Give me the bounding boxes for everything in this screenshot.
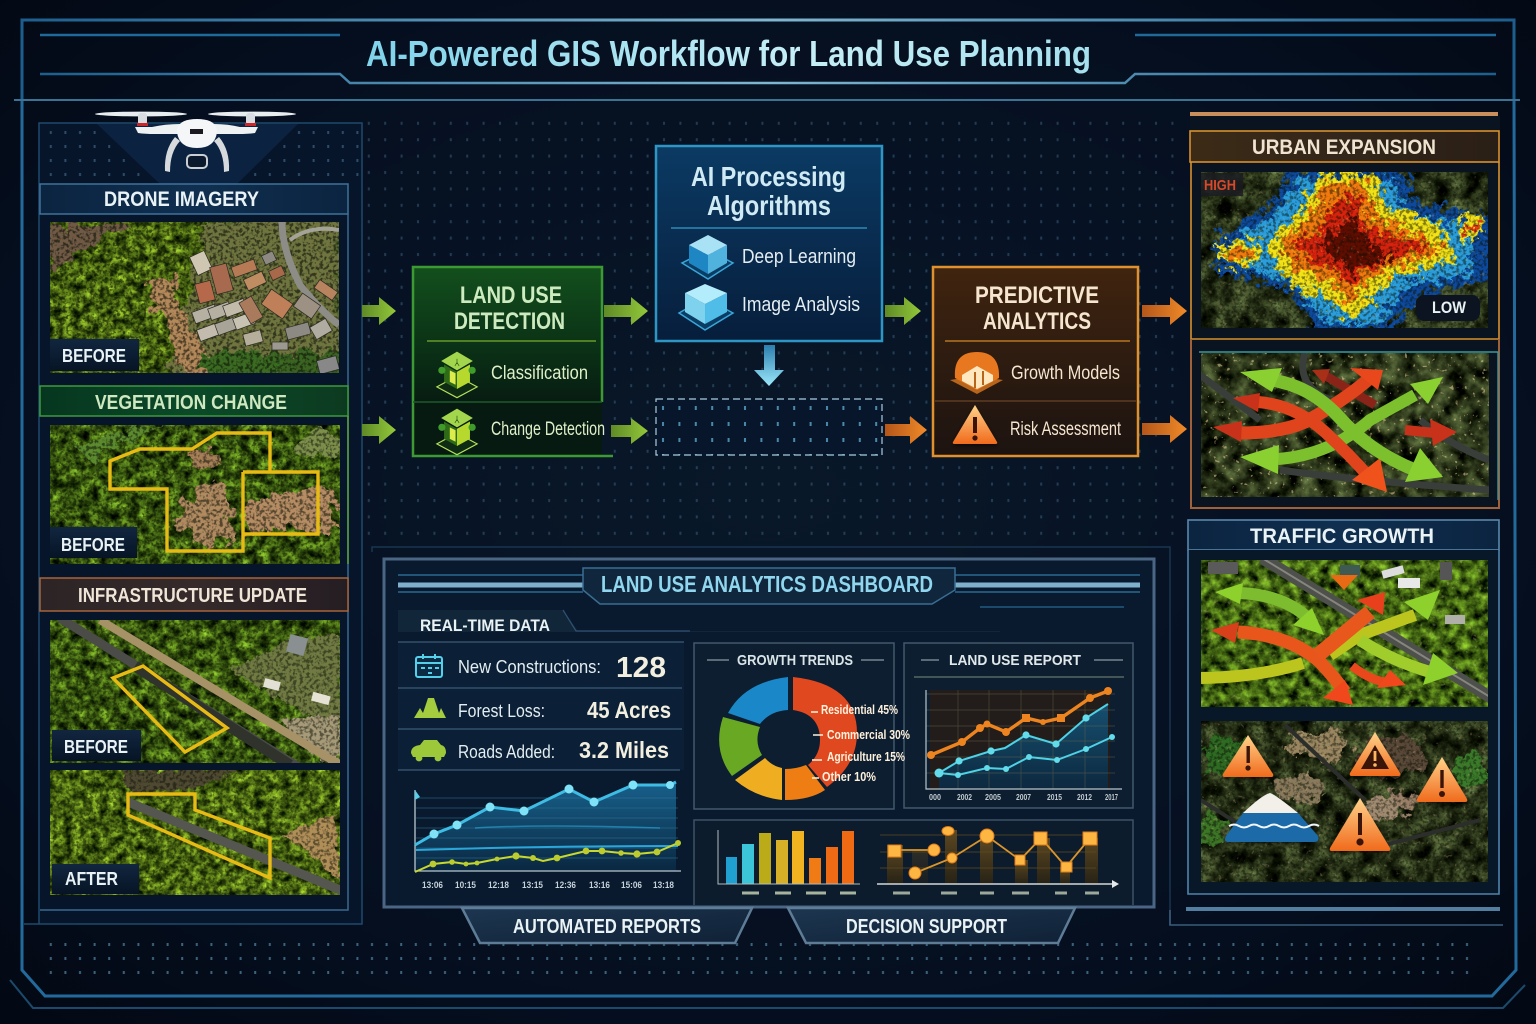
stat: forest loss: Forest Loss: — [458, 701, 545, 721]
line chart: real-time trend: 12:18 — [488, 880, 509, 891]
line chart: real-time trend: 13:18 — [653, 880, 674, 891]
heading: predictive analytics — [975, 282, 1099, 335]
arrow: red small top — [1312, 369, 1375, 405]
panel: real-time stats — [398, 642, 684, 770]
panel: growth trends donut: Agriculture 15% — [827, 750, 905, 764]
icon: image analysis cube — [679, 284, 733, 330]
icon: change detection — [437, 409, 477, 455]
heading: vegetation change: VEGETATION CHANGE — [95, 392, 287, 414]
image: highway after — [50, 770, 345, 895]
icon: classification — [437, 352, 477, 398]
text: image analysis: Image Analysis — [742, 294, 860, 316]
heat map: urban expansion — [1201, 172, 1488, 328]
line chart: real-time trend — [415, 780, 681, 891]
map: traffic flow arrows — [1200, 353, 1489, 497]
image: vegetation change with yellow outline — [50, 425, 342, 564]
map: risk warnings — [1196, 721, 1488, 882]
dashed placeholder box — [656, 399, 882, 455]
arrows: analytics into outputs — [1142, 297, 1187, 443]
icon: flood mountain — [1225, 793, 1319, 842]
tab: real-time data: REAL-TIME DATA — [420, 616, 550, 635]
line chart: real-time trend: 13:16 — [589, 880, 610, 891]
text: change detection: Change Detection — [491, 419, 605, 440]
panel: growth trends donut: Commercial 30% — [827, 728, 910, 742]
heading: infrastructure update: INFRASTRUCTURE UPDATE — [78, 585, 307, 607]
icon: warning triangle 2 — [1350, 732, 1400, 776]
stat: new constructions: 128 — [616, 652, 666, 684]
panel: land use detection — [413, 267, 613, 456]
stat: roads added: 3.2 Miles — [579, 737, 669, 763]
line chart: real-time trend: 12:36 — [555, 880, 576, 891]
arrow: red rising — [1213, 368, 1383, 442]
stat: forest loss: 45 Acres — [587, 697, 671, 723]
line chart: real-time trend: 10:15 — [455, 880, 477, 891]
panel: land use report chart: 2015 — [1047, 793, 1062, 802]
icon: drone — [95, 112, 296, 172]
panel: drone imagery and before/after sources — [24, 112, 362, 924]
label: high — [1201, 173, 1243, 196]
stat: forest loss — [414, 697, 671, 723]
map: traffic growth arrows — [1201, 558, 1495, 707]
icon: warning triangle 1 — [1223, 735, 1273, 777]
icon: growth models — [950, 352, 1003, 394]
icon: deep learning cube — [682, 235, 733, 279]
arrows: processing into analytics — [885, 297, 927, 444]
arrows: detection into processing — [604, 297, 648, 444]
heading: drone imagery — [40, 184, 348, 214]
tab: automated reports — [462, 908, 752, 943]
tab: automated reports: AUTOMATED REPORTS — [513, 916, 701, 938]
bar chart — [718, 830, 860, 893]
panel: predictive analytics — [933, 267, 1138, 456]
heading: land use detection: DETECTION — [454, 308, 565, 335]
text: risk assessment: Risk Assessment — [1010, 419, 1122, 440]
label: before — [50, 527, 137, 558]
panel: land use report chart — [904, 643, 1133, 808]
panel: land use report chart: 2012 — [1077, 793, 1092, 802]
label: before — [52, 730, 141, 761]
arrow: green top — [1215, 583, 1324, 635]
heading: land use detection — [454, 282, 565, 335]
icon: risk assessment warning — [953, 405, 997, 444]
tab: decision support: DECISION SUPPORT — [846, 916, 1007, 938]
heading: ai processing algorithms: AI Processing — [691, 161, 846, 192]
panel: land use report chart: 000 — [929, 793, 941, 802]
panel: land use report chart: 2005 — [985, 793, 1001, 802]
label: before — [50, 339, 139, 371]
panel: growth trends donut: GROWTH TRENDS — [737, 652, 853, 669]
stat: roads added: Roads Added: — [458, 742, 555, 762]
text: deep learning: Deep Learning — [742, 246, 856, 268]
arrow: red falling — [1211, 622, 1353, 705]
heading: land use analytics dashboard — [583, 568, 955, 604]
line chart: real-time trend: 13:06 — [422, 880, 443, 891]
panel: growth trends donut — [694, 643, 910, 809]
label: before: BEFORE — [61, 535, 125, 555]
panel: land use report chart: 2017 — [1105, 793, 1118, 802]
label: after: AFTER — [65, 869, 118, 889]
label: low: LOW — [1432, 298, 1467, 317]
text: classification: Classification — [491, 363, 588, 384]
panel: outputs column — [1170, 112, 1503, 925]
heading: urban expansion — [1190, 131, 1499, 162]
panel: dashboard — [372, 547, 1170, 925]
label: before: BEFORE — [64, 737, 128, 757]
icon: warning triangle 3 — [1417, 757, 1467, 802]
panel: land use report chart: LAND USE REPORT — [949, 652, 1081, 669]
arrow: green rising — [1240, 377, 1443, 474]
tab: decision support — [788, 908, 1075, 943]
arrow: red falling — [1233, 393, 1387, 492]
arrow: red short — [1405, 419, 1457, 446]
text: growth models: Growth Models — [1011, 363, 1120, 384]
heading: predictive analytics: ANALYTICS — [983, 308, 1091, 335]
arrows: sources into detection — [362, 297, 396, 444]
heading: vegetation change — [40, 386, 348, 416]
label: before: BEFORE — [62, 346, 126, 366]
heading: urban expansion: URBAN EXPANSION — [1252, 136, 1436, 159]
heading: traffic growth — [1188, 520, 1499, 550]
tab: real-time data — [398, 610, 1000, 635]
image: aerial village before — [50, 222, 339, 373]
panel: land use report chart: 2002 — [957, 793, 972, 802]
arrow: yellow-green band — [1201, 590, 1440, 678]
heading: land use analytics dashboard: LAND USE ANALYTICS DASHBOARD — [601, 571, 933, 597]
arrow: green falling — [1240, 368, 1443, 482]
label: low — [1416, 295, 1480, 321]
heading: land use detection: LAND USE — [460, 282, 562, 309]
line chart: real-time trend: 13:15 — [522, 880, 544, 891]
arrow: orange rising — [1318, 592, 1385, 655]
arrow: green falling — [1360, 640, 1458, 685]
heading: ai processing algorithms: Algorithms — [707, 190, 831, 221]
heading: traffic growth: TRAFFIC GROWTH — [1250, 525, 1434, 548]
heading: ai processing algorithms — [691, 161, 846, 221]
panel: land use report chart: 2007 — [1016, 793, 1031, 802]
panel: bar and step charts — [694, 820, 1133, 905]
panel: growth trends donut: Residential 45% — [821, 703, 898, 717]
panel: ai processing algorithms — [656, 146, 882, 341]
stat: new constructions — [416, 652, 666, 684]
heading: infrastructure update — [40, 578, 348, 611]
line chart: real-time trend: 15:06 — [621, 880, 642, 891]
stat: roads added — [411, 737, 669, 763]
frame: traffic flow map — [1191, 339, 1499, 508]
panel: growth trends donut: Other 10% — [822, 770, 876, 784]
combo chart — [877, 826, 1119, 893]
arrow: processing to dashed area — [754, 345, 784, 386]
title: AI-Powered GIS Workflow for Land Use Planning — [366, 33, 1091, 74]
arrow: small red — [1352, 666, 1406, 688]
icon: warning triangle 4 — [1330, 798, 1390, 851]
heading: predictive analytics: PREDICTIVE — [975, 282, 1099, 309]
label: high: HIGH — [1204, 177, 1236, 194]
image: highway before — [50, 618, 340, 768]
stat: new constructions: New Constructions: — [458, 657, 601, 677]
label: after — [52, 864, 139, 894]
heading: drone imagery: DRONE IMAGERY — [104, 188, 259, 211]
